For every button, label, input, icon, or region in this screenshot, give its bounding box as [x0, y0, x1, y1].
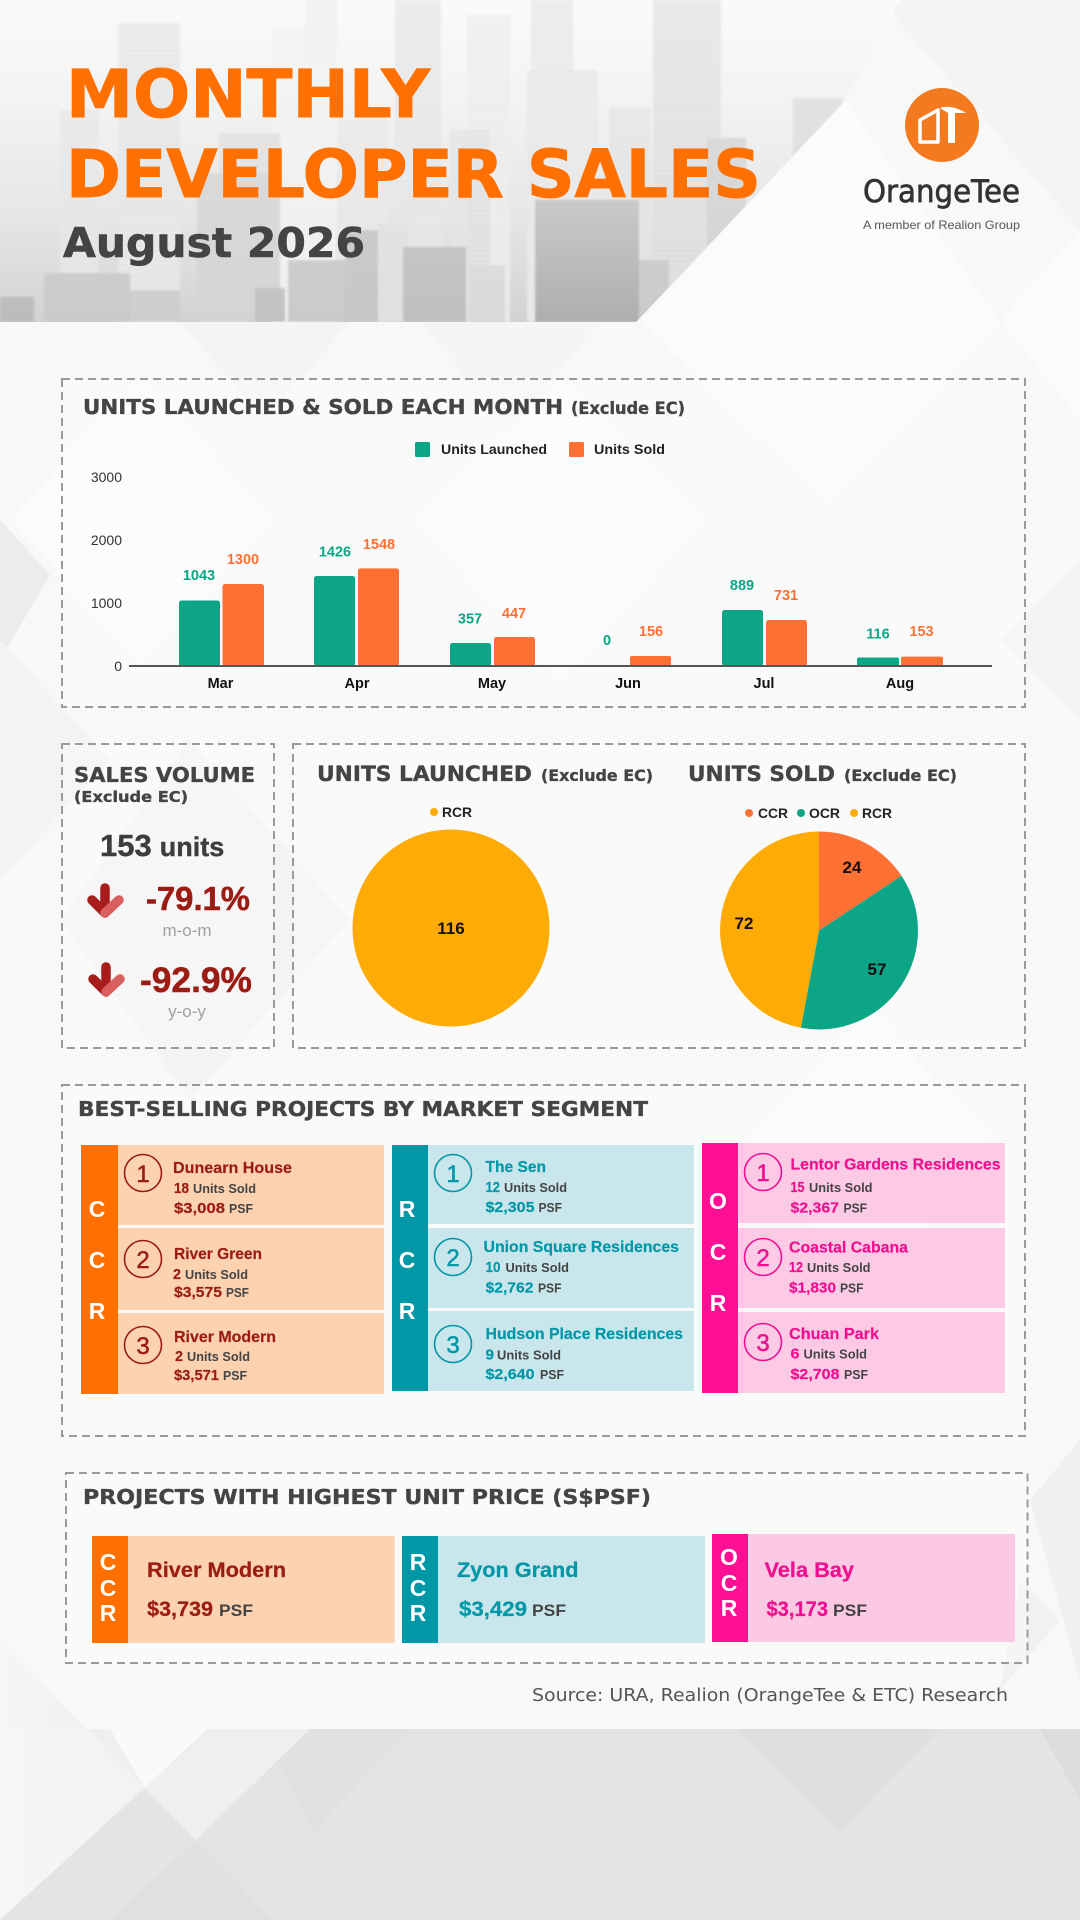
stat: 153 units: 153 units	[100, 828, 224, 863]
item: Dunearn House: Dunearn House	[173, 1160, 292, 1177]
item: Hudson Place Residences: $2,640	[486, 1366, 534, 1383]
item: Chuan Park	[744, 1324, 879, 1383]
card: OCR Vela Bay: Vela Bay	[764, 1559, 854, 1582]
column: RCR	[392, 1145, 694, 1391]
item: Coastal Cabana: 2	[756, 1245, 770, 1272]
heading: highest unit price: PROJECTS WITH HIGHEST UNIT PRICE (S$PSF)	[83, 1485, 651, 1509]
card: RCR Zyon Grand: PSF	[532, 1601, 566, 1620]
heading: units launched: UNITS LAUNCHED	[317, 762, 532, 786]
label: m-o-m: m-o-m	[162, 921, 212, 940]
legend: Units Sold	[594, 441, 665, 457]
item: Lentor Gardens Residences: PSF	[844, 1202, 867, 1216]
item: Union Square Residences	[434, 1238, 679, 1296]
item: River Green	[124, 1240, 262, 1301]
item: Hudson Place Residences: 3	[446, 1332, 460, 1359]
item: River Green: PSF	[226, 1286, 249, 1300]
item: Union Square Residences: Units Sold	[506, 1261, 569, 1275]
item: Hudson Place Residences	[434, 1326, 683, 1383]
item: Dunearn House: 1	[136, 1161, 150, 1188]
panel: units launched and sold each month	[62, 379, 1025, 707]
header skyline image	[0, 0, 900, 327]
card: RCR Zyon Grand: C	[410, 1575, 426, 1601]
item: The Sen: 12	[486, 1179, 500, 1196]
bar chart: 156	[639, 624, 663, 640]
card: OCR Vela Bay	[712, 1534, 1015, 1642]
item: River Green: $3,575	[174, 1284, 222, 1301]
card: OCR Vela Bay: $3,173	[766, 1598, 828, 1621]
note: exclude EC: (Exclude EC)	[541, 766, 653, 785]
item: Lentor Gardens Residences: 15	[790, 1179, 804, 1196]
bar chart: May	[478, 676, 506, 692]
item: Hudson Place Residences: Units Sold	[497, 1348, 561, 1362]
column: CCR: C	[89, 1196, 105, 1222]
bar chart: 3000	[91, 469, 122, 485]
item: Dunearn House: PSF	[229, 1202, 253, 1216]
card: CCR River Modern: R	[100, 1600, 117, 1626]
bar chart: 2000	[91, 532, 122, 548]
panel: sales volume	[62, 744, 274, 1048]
logo: OrangeTee: OrangeTee	[863, 174, 1020, 210]
item: Union Square Residences: Union Square Residences	[484, 1239, 679, 1256]
bar chart: 357	[458, 612, 482, 628]
title: Developer Sales: DEVELOPER SALES	[66, 137, 761, 213]
heading: sales volume: SALES VOLUME	[74, 763, 255, 787]
column: RCR: R	[399, 1196, 416, 1222]
panel: pie charts	[293, 744, 1025, 1048]
item: Coastal Cabana: Coastal Cabana	[789, 1240, 908, 1256]
legend: sold	[745, 805, 892, 821]
heading: units sold: UNITS SOLD	[688, 762, 835, 786]
item: The Sen: PSF	[538, 1201, 562, 1215]
bar chart: Jun	[615, 676, 641, 692]
item: Chuan Park: PSF	[844, 1368, 868, 1382]
column: RCR: C	[399, 1247, 415, 1273]
bar chart: 153	[909, 624, 934, 640]
item: Chuan Park: Units Sold	[804, 1348, 867, 1362]
icon: down arrow month on month	[92, 888, 119, 913]
item: Lentor Gardens Residences: Lentor Gardens Residences	[790, 1156, 1000, 1174]
card: RCR Zyon Grand: R	[410, 1600, 427, 1626]
subtitle: August 2026: August 2026	[63, 219, 365, 267]
item: Hudson Place Residences: PSF	[540, 1368, 564, 1382]
item: Coastal Cabana: $1,830	[789, 1280, 836, 1296]
item: Coastal Cabana: Units Sold	[807, 1261, 870, 1275]
item: Lentor Gardens Residences: Units Sold	[809, 1181, 872, 1195]
item: The Sen: $2,305	[486, 1199, 534, 1216]
item: The Sen	[434, 1154, 567, 1216]
column: CCR: R	[89, 1298, 106, 1324]
item: Union Square Residences: PSF	[538, 1282, 562, 1296]
legend: sold: OCR	[809, 805, 840, 821]
item: The Sen: 1	[446, 1161, 460, 1188]
logo: OrangeTee	[863, 88, 1020, 232]
panel: highest unit price	[66, 1473, 1028, 1663]
column: CCR	[81, 1145, 384, 1394]
column: OCR: R	[710, 1290, 727, 1316]
item: Coastal Cabana: 12	[789, 1259, 803, 1276]
item: River Modern: 3	[136, 1333, 150, 1360]
legend: Units Launched	[441, 441, 547, 457]
column: CCR: C	[89, 1247, 105, 1273]
card: OCR Vela Bay: C	[721, 1570, 737, 1596]
item: Chuan Park: 3	[756, 1330, 770, 1357]
legend	[415, 441, 665, 457]
item: Union Square Residences: $2,762	[486, 1280, 534, 1296]
stat: year on year change: -92.9%	[140, 961, 252, 1000]
note: exclude EC: (Exclude EC)	[844, 766, 957, 785]
source note: Source: URA, Realion (OrangeTee & ETC) Research	[532, 1685, 1008, 1706]
item: Lentor Gardens Residences: 1	[756, 1160, 770, 1187]
card: OCR Vela Bay: O	[720, 1544, 738, 1570]
card: CCR River Modern: PSF	[219, 1601, 253, 1620]
bar chart: 0	[114, 658, 122, 674]
item: River Green: River Green	[174, 1246, 262, 1263]
item: The Sen: Units Sold	[504, 1181, 567, 1195]
item: Dunearn House: 18	[174, 1180, 189, 1197]
bar chart: Jul	[754, 676, 774, 692]
item: Hudson Place Residences: 9	[486, 1346, 494, 1364]
bar chart: 731	[774, 588, 798, 604]
item: Lentor Gardens Residences: $2,367	[790, 1200, 839, 1216]
card: OCR Vela Bay: PSF	[833, 1601, 867, 1620]
bar chart: Mar	[208, 676, 234, 692]
bar chart: 889	[730, 578, 754, 594]
card: CCR River Modern: C	[100, 1549, 116, 1575]
column: RCR: R	[399, 1298, 416, 1324]
card: CCR River Modern: C	[100, 1575, 116, 1601]
bar chart: 0	[603, 633, 611, 649]
bar chart: 1426	[319, 544, 351, 560]
bar chart: 116	[866, 626, 890, 642]
legend: sold: CCR	[758, 805, 788, 821]
bar chart: 1548	[363, 537, 395, 553]
panel: best-selling projects	[62, 1085, 1025, 1436]
pie chart: units launched	[352, 830, 550, 1026]
heading: best-selling projects: BEST-SELLING PROJECTS BY MARKET SEGMENT	[78, 1097, 648, 1121]
bar chart: 447	[502, 606, 526, 622]
pie chart: units launched: 116	[437, 919, 465, 938]
title: Monthly: MONTHLY	[66, 57, 432, 133]
item: River Green: 2	[173, 1266, 181, 1283]
item: Union Square Residences: 10	[486, 1259, 500, 1276]
item: Coastal Cabana	[744, 1238, 908, 1296]
item: River Modern: Units Sold	[187, 1350, 250, 1364]
icon: down arrow year on year	[93, 967, 120, 992]
item: River Modern	[124, 1326, 276, 1384]
bar chart: 1043	[183, 568, 215, 584]
card: OCR Vela Bay: R	[721, 1595, 738, 1621]
item: Chuan Park: Chuan Park	[789, 1326, 879, 1343]
pie chart: units sold: 72	[735, 914, 753, 933]
card: CCR River Modern	[92, 1536, 395, 1643]
note: exclude EC: (Exclude EC)	[74, 788, 188, 806]
item: Dunearn House	[124, 1154, 292, 1217]
logo: OrangeTee: A member of Realion Group	[863, 218, 1020, 232]
item: The Sen: The Sen	[486, 1159, 546, 1176]
item: River Modern: River Modern	[174, 1329, 276, 1346]
bar chart: 1300	[227, 552, 259, 568]
column: OCR: C	[710, 1239, 726, 1265]
column: OCR	[702, 1143, 1005, 1393]
legend: launched: RCR	[442, 804, 472, 820]
bar chart: Apr	[345, 676, 370, 692]
pie chart: units sold: 24	[843, 858, 862, 877]
item: River Green: Units Sold	[185, 1268, 248, 1282]
card: CCR River Modern: River Modern	[147, 1559, 286, 1582]
pie chart: units sold	[720, 832, 918, 1029]
heading: units launched and sold: UNITS LAUNCHED & SOLD EACH MONTH	[83, 395, 563, 419]
item: River Green: 2	[136, 1247, 150, 1274]
column: OCR: O	[709, 1188, 727, 1214]
bar chart: Aug	[886, 676, 914, 692]
note: exclude EC: (Exclude EC)	[571, 399, 685, 418]
card: CCR River Modern: $3,739	[147, 1598, 213, 1621]
card: RCR Zyon Grand: Zyon Grand	[457, 1559, 578, 1582]
item: River Modern: 2	[175, 1348, 183, 1365]
item: Lentor Gardens Residences	[744, 1154, 1000, 1216]
item: Union Square Residences: 2	[446, 1245, 460, 1272]
item: River Modern: PSF	[223, 1369, 247, 1383]
item: Dunearn House: Units Sold	[193, 1182, 256, 1196]
pie chart: units sold: 57	[868, 960, 886, 979]
stat: month on month change: -79.1%	[146, 880, 250, 917]
label: y-o-y: y-o-y	[168, 1002, 206, 1021]
legend: sold: RCR	[862, 805, 892, 821]
item: Chuan Park: $2,708	[790, 1366, 840, 1383]
item: Hudson Place Residences: Hudson Place Residences	[486, 1326, 683, 1343]
card: RCR Zyon Grand: $3,429	[459, 1598, 527, 1621]
bar chart: 1000	[91, 595, 122, 611]
bar chart	[91, 469, 992, 692]
item: Coastal Cabana: PSF	[840, 1282, 864, 1296]
item: Chuan Park: 6	[790, 1346, 800, 1362]
card: RCR Zyon Grand: R	[410, 1549, 427, 1575]
item: River Modern: $3,571	[174, 1367, 219, 1384]
item: Dunearn House: $3,008	[174, 1200, 225, 1217]
card: RCR Zyon Grand	[402, 1536, 705, 1643]
